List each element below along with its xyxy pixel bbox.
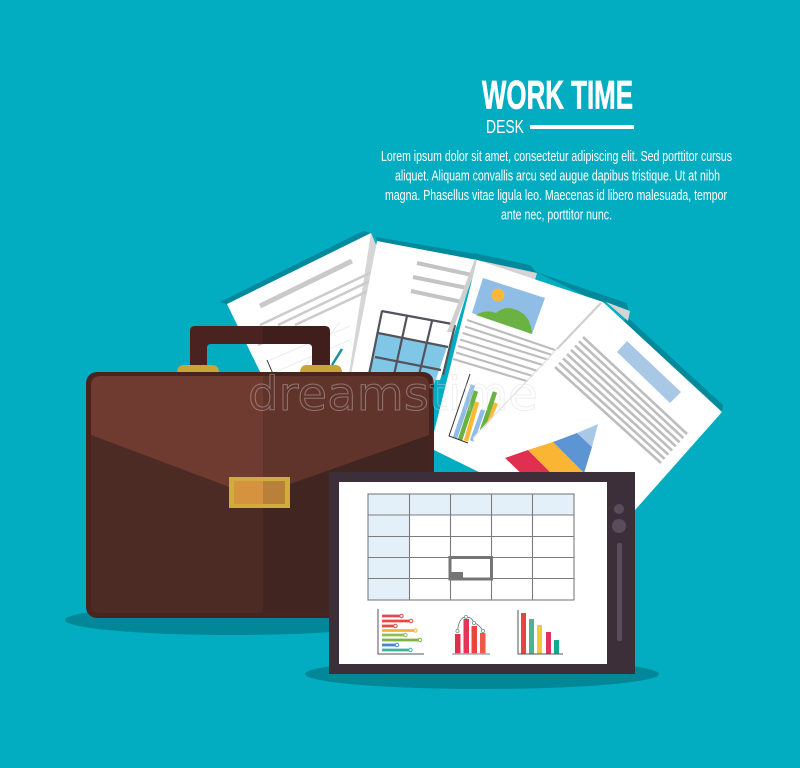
page text lines <box>555 337 687 463</box>
lower body <box>91 435 263 613</box>
photo placeholder <box>472 278 545 334</box>
body text <box>381 149 732 224</box>
chart: descending bars <box>518 610 563 654</box>
gray spine <box>348 233 376 380</box>
page shadows <box>220 231 723 413</box>
case border <box>86 372 434 618</box>
flap <box>91 376 263 488</box>
tablet camera and buttons <box>612 504 626 641</box>
buckle <box>229 477 290 508</box>
gray fold <box>557 303 601 349</box>
tablet <box>329 472 635 674</box>
faint chart grid <box>270 322 350 372</box>
blue heading bar <box>617 341 681 403</box>
page text lines <box>258 272 372 345</box>
teal arrow <box>332 349 342 365</box>
pyramid chart <box>505 424 598 480</box>
document page 2 <box>350 241 477 385</box>
body text: ante nec, porttitor nunc. <box>501 208 612 224</box>
page text lines <box>453 320 555 382</box>
document page 4 <box>473 302 722 510</box>
tablet body <box>329 472 635 674</box>
handle clips <box>177 365 219 373</box>
schedule table <box>368 494 574 600</box>
document page 1 <box>227 233 376 380</box>
page text lines <box>411 263 472 302</box>
gray spine between pages <box>447 259 479 332</box>
title block <box>482 74 634 137</box>
hill <box>476 308 532 334</box>
tilted bar chart <box>449 374 496 443</box>
handle <box>190 326 330 372</box>
page heading bar <box>260 261 352 306</box>
document page 3 <box>430 260 603 475</box>
blue table <box>366 311 455 385</box>
subtitle: desk: DESK <box>486 117 524 137</box>
chart axis <box>267 360 273 374</box>
tablet screen <box>339 482 607 664</box>
briefcase <box>86 326 434 618</box>
title: work time: WORK TIME <box>482 74 633 118</box>
chart: horizontal bars <box>378 609 424 654</box>
selected cell <box>450 558 492 579</box>
ground shadow: briefcase <box>65 605 399 635</box>
sun <box>492 288 504 302</box>
watermark: dreamstime <box>248 367 538 421</box>
ground shadow: tablet <box>305 659 659 689</box>
chart: bars with trend line <box>452 615 490 654</box>
subtitle rule <box>530 125 634 129</box>
underlying gray pages <box>477 260 630 321</box>
